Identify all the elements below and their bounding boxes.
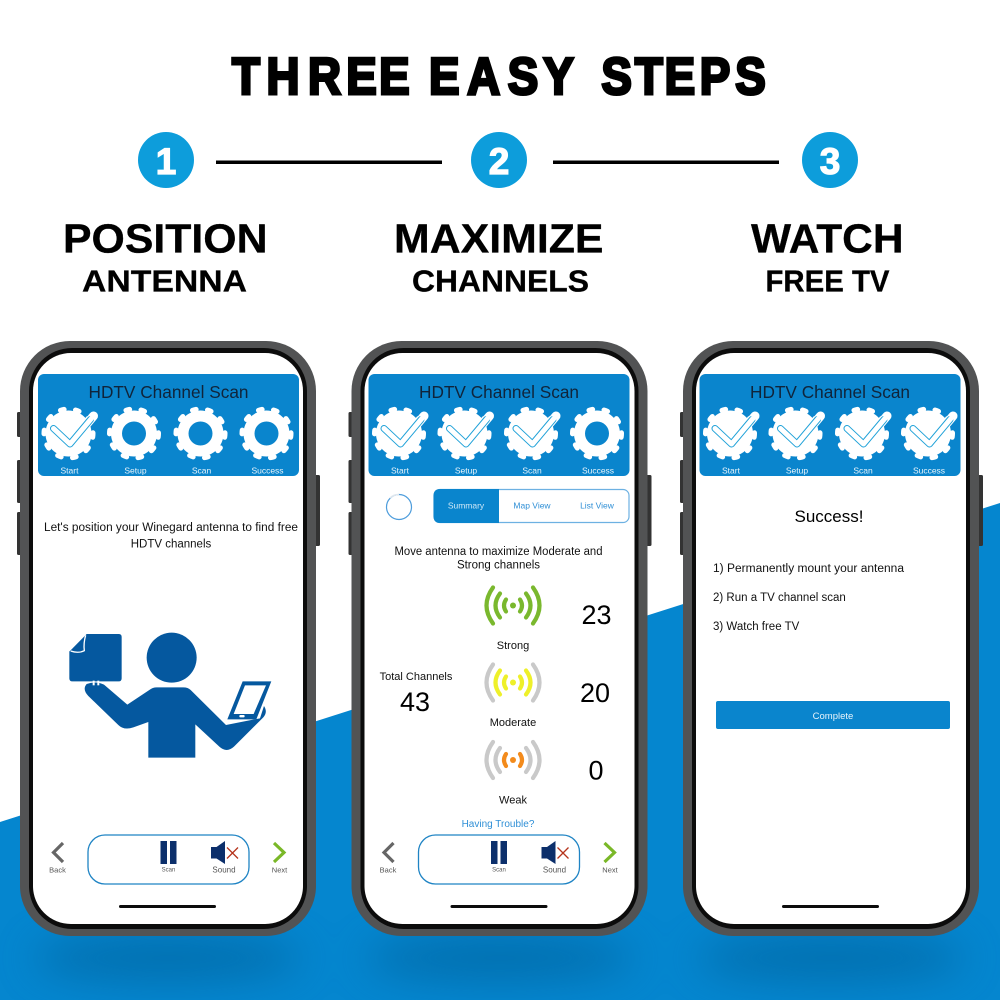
panel: phone 1 [17,341,320,936]
bottom toolbar [380,835,619,884]
view tabs: List View [580,500,615,510]
next steps list: 3) Watch free TV [713,621,800,633]
instruction text: Move antenna to maximize Moderate and [394,546,602,558]
label: strong: Strong [497,640,529,652]
complete button [716,701,950,729]
icon: person holding antenna and tablet [69,633,271,758]
app header with progress gears [38,374,299,476]
step badge 1 [138,132,194,188]
label: moderate: Moderate [490,717,536,729]
instruction text: HDTV channels [131,538,212,550]
app header with progress gears [700,374,960,476]
link: having trouble: Having Trouble? [462,819,535,830]
background: blue diagonal band [0,503,1000,1000]
next steps list: 1) Permanently mount your antenna [713,563,905,575]
heading: maximize channels: CHANNELS [412,264,589,298]
step badge 3 [802,132,858,188]
next steps list: 2) Run a TV channel scan [713,592,846,604]
icon: strong signal [486,588,540,624]
app header with progress gears [368,374,630,476]
success heading: Success! [795,507,863,526]
step badge 1: 1 [156,141,176,182]
loading spinner [386,494,412,520]
instruction text [44,522,298,550]
label: weak: Weak [499,794,527,806]
step indicator row [138,132,858,188]
total channels [380,671,453,717]
title: THREE EASY STEPS [232,48,766,106]
step badge 2: 2 [489,141,509,182]
complete button: Complete [813,711,853,722]
count: strong: 23 [581,600,612,630]
heading: position antenna [63,216,268,298]
heading: position antenna: ANTENNA [82,264,247,298]
connector line 1 to 2 [216,160,442,164]
step badge 3: 3 [820,141,840,182]
count: weak: 0 [588,756,604,786]
heading: maximize channels [394,216,604,298]
icon: moderate signal [486,664,540,700]
panel: phone 3 [680,341,983,936]
step badge 2 [471,132,527,188]
heading: watch free tv [751,216,904,298]
panel: phone 2 [348,341,652,936]
phone shadows [33,934,966,982]
count: moderate: 20 [580,678,610,708]
instruction text: Let's position your Winegard antenna to find free [44,522,298,534]
icon: weak signal [486,742,540,778]
instruction text [394,546,602,572]
bottom toolbar [49,835,288,884]
total channels: Total Channels [380,671,453,683]
heading: watch free tv: FREE TV [766,264,890,298]
heading: watch free tv: WATCH [751,216,904,262]
total channels: 43 [400,687,430,717]
next steps list [713,563,905,633]
view tabs: Map View [513,500,551,510]
view tabs [434,489,629,523]
heading: maximize channels: MAXIMIZE [394,216,604,262]
heading: position antenna: POSITION [63,216,268,262]
instruction text: Strong channels [457,560,540,572]
connector line 2 to 3 [553,160,779,164]
view tabs: Summary [448,500,485,510]
